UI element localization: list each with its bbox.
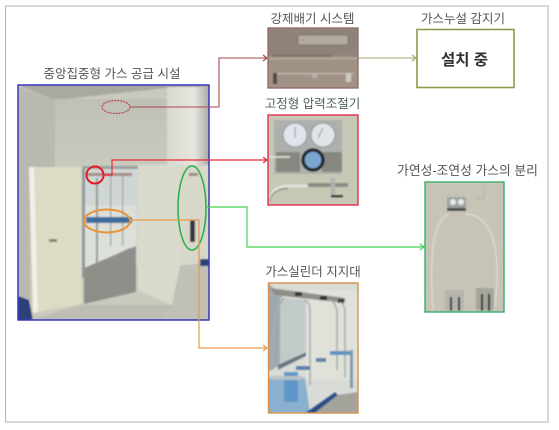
callout: regulator marker circle: [86, 166, 104, 184]
arrow: to cylinder support: [130, 220, 267, 351]
heading: forced exhaust system: 강제배기 시스템: [271, 12, 354, 26]
heading: gas leak detector: 가스누설 감지기: [421, 12, 505, 26]
heading: flammable and oxidizing gas separation: 가연성-조연성 가스의 분리: [397, 163, 538, 178]
callout: cylinder support marker ellipse: [84, 210, 130, 232]
arrow: to exhaust system: [130, 55, 267, 107]
photo: fixed pressure regulator: [268, 115, 358, 205]
heading: gas cylinder support: 가스실린더 지지대: [265, 265, 361, 279]
arrow: to gas leak detector: [358, 55, 416, 61]
callout: exhaust marker ellipse: [102, 100, 130, 114]
photo border: [18, 85, 209, 320]
text: installing: 설치 중: [441, 51, 488, 69]
photo: gas cylinder support: [268, 283, 358, 413]
photo: gas separation: [425, 182, 504, 312]
callout: separation marker ellipse: [178, 166, 206, 250]
heading: central gas supply facility: 중앙집중형 가스 공급 시설: [44, 67, 180, 81]
panel: gas leak detector: [417, 30, 514, 88]
photo: forced exhaust system: [268, 28, 358, 88]
photo: central gas supply room: [18, 85, 209, 320]
heading: fixed pressure regulator: 고정형 압력조절기: [265, 97, 360, 111]
arrow: to regulator: [103, 157, 267, 175]
arrow: to gas separation: [207, 207, 424, 250]
